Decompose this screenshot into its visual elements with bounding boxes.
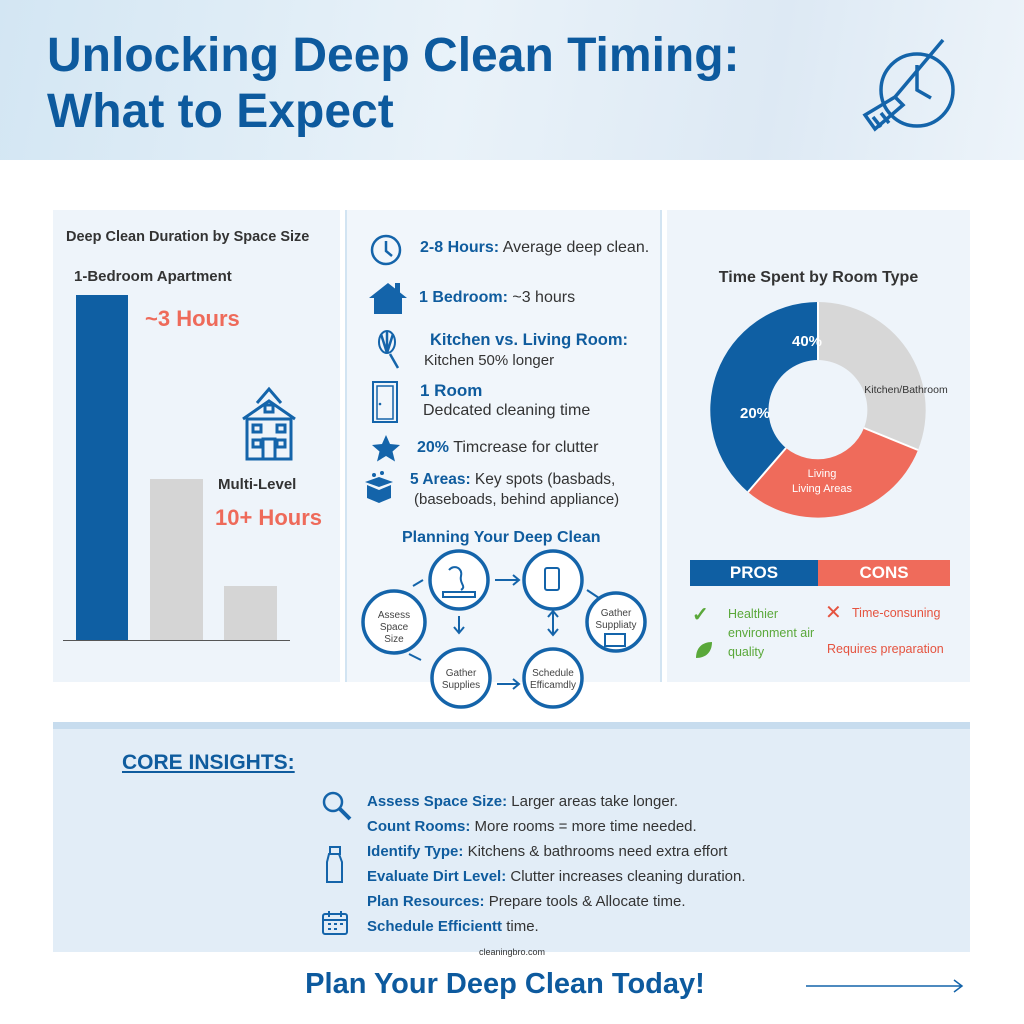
fact: kitchen vs living room: Kitchen vs. Living Room: [430, 331, 628, 349]
title: Unlocking Deep Clean Timing: [47, 29, 740, 82]
flow diagram: Space [380, 622, 409, 633]
pros cons header: PROS [730, 563, 778, 582]
cons list: Requires preparation [827, 642, 944, 656]
panel: room type [667, 210, 970, 682]
panel: key facts [345, 210, 662, 682]
heading: planning: Planning Your Deep Clean [402, 529, 601, 546]
header band [0, 0, 1024, 160]
panel: core insights [53, 722, 970, 952]
label multi-level: Multi-Level [218, 476, 296, 493]
insights list: Count Rooms: More rooms = more time needed. [367, 818, 697, 835]
donut chart: Living [808, 468, 836, 480]
donut chart: 40% [792, 333, 822, 350]
donut chart: Kitchen/Bathroom [864, 384, 948, 396]
fact: 1 bedroom [369, 283, 575, 314]
bar chart [63, 295, 290, 641]
fact: 1 room: Dedcated cleaning time [423, 402, 590, 419]
flow diagram: Assess [378, 610, 410, 621]
chart title: Time Spent by Room Type [719, 269, 918, 286]
fact: 2-8 hours: 2-8 Hours: Average deep clean. [420, 239, 649, 256]
value 10+ hours: 10+ Hours [215, 505, 322, 530]
call to action: Plan Your Deep Clean Today! [305, 968, 705, 1000]
fact: kitchen vs living room: Kitchen 50% longer [424, 352, 554, 369]
insights list: Plan Resources: Prepare tools & Allocate time. [367, 893, 685, 910]
pros list: Healthier environment air quality [728, 607, 814, 659]
fact: 20% clutter [372, 435, 598, 462]
flow diagram [361, 549, 647, 709]
flow diagram: Efficamdly [530, 680, 576, 691]
insights list: Identify Type: Kitchens & bathrooms need extra effort [367, 843, 727, 860]
insights list: Schedule Efficientt time. [367, 918, 539, 935]
fact: 5 areas: (baseboads, behind appliance) [414, 491, 619, 508]
insights list [322, 792, 746, 935]
cons list: Time-consuning [852, 606, 940, 620]
flow diagram: Gather [601, 608, 632, 619]
value ~3 hours: ~3 Hours [145, 306, 240, 331]
icon: broom clock [862, 38, 955, 132]
pros list: ✓ [692, 604, 709, 626]
flow diagram: Suppliaty [595, 620, 637, 631]
fact: 5 areas: 5 Areas: Key spots (basbads, [410, 471, 615, 488]
source text: cleaningbro.com [479, 947, 545, 957]
arrow [806, 979, 964, 993]
fact: 2-8 hours [370, 234, 649, 266]
fact: 5 areas [365, 471, 619, 508]
donut chart [710, 302, 948, 518]
label 1-bedroom: 1-Bedroom Apartment [74, 268, 232, 285]
donut chart: 20% [740, 405, 770, 422]
cons list [825, 602, 944, 656]
title: What to Expect [47, 85, 394, 138]
panel: duration by space size [53, 210, 340, 682]
flow diagram: Schedule [532, 668, 574, 679]
chart title: Deep Clean Duration by Space Size [66, 229, 309, 245]
flow diagram: Supplies [442, 680, 480, 691]
fact: kitchen vs living room [378, 330, 628, 369]
icon: building [242, 386, 296, 460]
donut chart: Living Areas [792, 483, 852, 495]
cons list: ✕ [825, 602, 842, 624]
pros cons header [690, 560, 950, 586]
pros cons header: CONS [859, 563, 909, 582]
insights list: Evaluate Dirt Level: Clutter increases cleaning duration. [367, 868, 746, 885]
heading core insights: CORE INSIGHTS: [122, 751, 295, 774]
title [47, 29, 740, 138]
flow diagram: Gather [446, 668, 477, 679]
fact: 20% clutter: 20% Timcrease for clutter [417, 439, 598, 456]
fact: 1 room [372, 381, 590, 423]
fact: 1 bedroom: 1 Bedroom: ~3 hours [419, 289, 575, 306]
flow diagram: Size [384, 634, 404, 645]
insights list: Assess Space Size: Larger areas take longer. [367, 793, 678, 810]
fact: 1 room: 1 Room [420, 381, 482, 400]
pros list [692, 604, 814, 659]
